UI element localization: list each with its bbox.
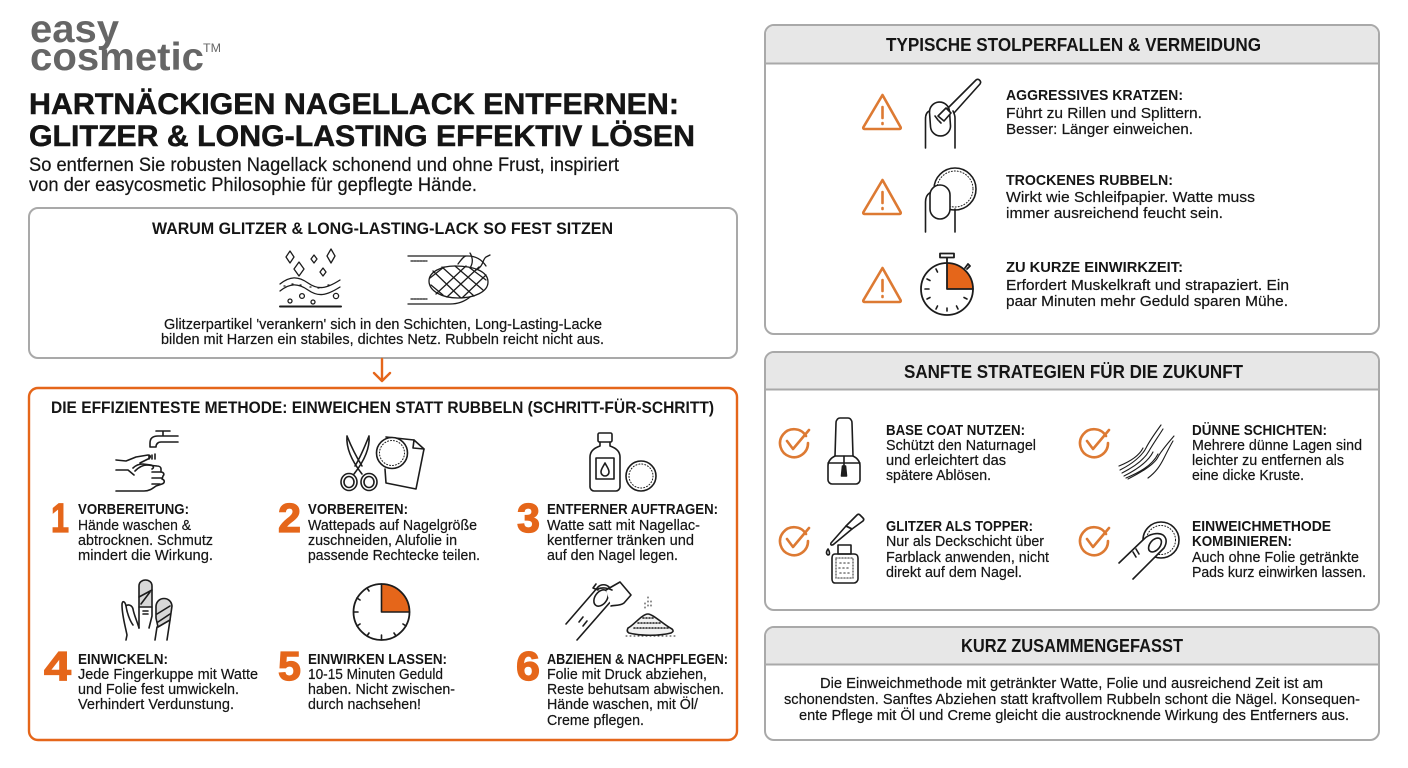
text: dünne schichten: Mehrere dünne Lagen sind: [1192, 437, 1362, 454]
text: base coat: BASE COAT NUTZEN:: [886, 422, 1025, 439]
panel: warum: [29, 208, 737, 358]
text: base coat: [886, 422, 1036, 484]
text: step 1: mindert die Wirkung.: [78, 547, 213, 564]
icon: peeling foil and residue: [566, 582, 676, 640]
text: step 4: und Folie fest umwickeln.: [78, 681, 239, 698]
text: step 3: Watte satt mit Nagellac-: [547, 517, 700, 534]
text: trockenes rubbeln: TROCKENES RUBBELN:: [1006, 172, 1173, 189]
text: step 5: EINWIRKEN LASSEN:: [308, 651, 447, 668]
icon: glitter brush and bottle: [826, 514, 864, 583]
icon: remover bottle and pad: [590, 433, 656, 491]
text: base coat: Schützt den Naturnagel: [886, 437, 1036, 454]
number 1: 1: [51, 495, 69, 541]
text: step 4: Verhindert Verdunstung.: [78, 696, 234, 713]
text: step 2: Wattepads auf Nagelgröße: [308, 517, 477, 534]
text: glitzer als topper: direkt auf dem Nagel.: [886, 564, 1022, 581]
text: warum: bilden mit Harzen ein stabiles, dichtes Netz. Rubbeln reicht nicht aus.: [161, 331, 604, 348]
heading: stolperfallen: TYPISCHE STOLPERFALLEN & VERMEIDUNG: [886, 35, 1261, 55]
text: step 4: Jede Fingerkuppe mit Watte: [78, 666, 258, 683]
text: step 6: ABZIEHEN & NACHPFLEGEN:: [547, 651, 728, 668]
number 5: 5: [278, 643, 301, 689]
text: step 5: durch nachsehen!: [308, 696, 421, 713]
subtitle: [29, 155, 620, 196]
text: step 2: VORBEREITEN:: [308, 501, 408, 518]
text: step 5: haben. Nicht zwischen-: [308, 681, 455, 698]
text: dünne schichten: eine dicke Kruste.: [1192, 467, 1304, 484]
text: dünne schichten: [1192, 422, 1362, 484]
text: step 1: VORBEREITUNG:: [78, 501, 189, 518]
text: zusammenfassung: [784, 675, 1360, 724]
number 2: 2: [278, 495, 301, 541]
text: step 5: 10-15 Minuten Geduld: [308, 666, 443, 683]
text: warum: Glitzerpartikel 'verankern' sich in den Schichten, Long-Lasting-Lacke: [164, 316, 602, 333]
text: glitzer als topper: Farblack anwenden, nicht: [886, 549, 1050, 566]
text: step 3: auf den Nagel legen.: [547, 547, 678, 564]
icon: warning 1: [863, 95, 901, 129]
heading: warum: WARUM GLITZER & LONG-LASTING-LACK SO FEST SITZEN: [152, 219, 613, 238]
text: dünne schichten: DÜNNE SCHICHTEN:: [1192, 422, 1327, 439]
icon: check 1: [780, 429, 809, 457]
logo: cosmetic: [30, 36, 204, 79]
logo: easy: [30, 8, 119, 51]
heading: methode: DIE EFFIZIENTESTE METHODE: EINWEICHEN STATT RUBBELN (SCHRITT-FÜR-SCHRITT): [51, 398, 714, 417]
text: aggressives kratzen: AGGRESSIVES KRATZEN:: [1006, 87, 1183, 104]
text: glitzer als topper: GLITZER ALS TOPPER:: [886, 518, 1033, 535]
text: einweichmethode kombinieren: Auch ohne Folie getränkte: [1192, 549, 1359, 566]
icon: base coat bottle: [828, 418, 860, 484]
text: base coat: und erleichtert das: [886, 452, 1006, 469]
icon: wrapped fingers: [122, 580, 172, 640]
title: GLITZER & LONG-LASTING EFFEKTIV LÖSEN: [29, 120, 695, 153]
icon: thin layers: [1119, 425, 1174, 479]
text: einweichmethode kombinieren: EINWEICHMETHODE: [1192, 518, 1331, 535]
text: einweichmethode kombinieren: [1192, 518, 1366, 581]
text: step 2: passende Rechtecke teilen.: [308, 547, 480, 564]
title: [29, 88, 695, 153]
panel: strategien: [765, 352, 1379, 610]
subtitle: So entfernen Sie robusten Nagellack schonend und ohne Frust, inspiriert: [29, 155, 620, 176]
icon: warning 3: [863, 268, 901, 302]
icon: check 2: [1080, 429, 1109, 457]
icon: resin net: [408, 253, 490, 304]
panel: zusammenfassung: [765, 627, 1379, 740]
text: step 3: [547, 501, 718, 564]
icon: finger scratching: [926, 79, 981, 148]
text: step 4: [78, 651, 258, 713]
text: step 6: Reste behutsam abwischen.: [547, 681, 724, 698]
text: einweichmethode kombinieren: Pads kurz einwirken lassen.: [1192, 564, 1366, 581]
text: step 1: Hände waschen &: [78, 517, 191, 534]
logo: [30, 8, 221, 79]
subtitle: von der easycosmetic Philosophie für gepflegte Hände.: [29, 175, 477, 196]
text: zu kurze einwirkzeit: paar Minuten mehr Geduld sparen Mühe.: [1006, 293, 1288, 310]
text: base coat: spätere Ablösen.: [886, 467, 991, 484]
text: dünne schichten: leichter zu entfernen als: [1192, 452, 1344, 469]
text: trockenes rubbeln: immer ausreichend feucht sein.: [1006, 205, 1223, 222]
text: einweichmethode kombinieren: KOMBINIEREN:: [1192, 533, 1292, 550]
number 6: 6: [516, 643, 540, 689]
text: zu kurze einwirkzeit: [1006, 259, 1289, 310]
text: trockenes rubbeln: Wirkt wie Schleifpapier. Watte muss: [1006, 189, 1255, 206]
text: glitzer als topper: Nur als Deckschicht über: [886, 533, 1044, 550]
text: trockenes rubbeln: [1006, 172, 1255, 222]
text: aggressives kratzen: Führt zu Rillen und Splittern.: [1006, 105, 1202, 122]
number 4: 4: [44, 643, 71, 689]
panel: methode: [29, 388, 737, 740]
icon: finger with dry pad: [926, 168, 976, 232]
icon: warning 2: [863, 180, 901, 214]
icon: check 3: [780, 527, 809, 555]
logo: TM: [203, 41, 221, 55]
icon: hands washing: [116, 431, 178, 491]
icon: stopwatch: [921, 254, 973, 315]
text: step 3: kentferner tränken und: [547, 532, 694, 549]
icon: check 4: [1080, 527, 1109, 555]
text: step 6: Hände waschen, mit Öl/: [547, 695, 699, 713]
text: step 2: zuschneiden, Alufolie in: [308, 532, 457, 549]
panel: stolperfallen: [765, 25, 1379, 334]
text: zusammenfassung: ente Pflege mit Öl und Creme gleicht die austrocknende Wirkung des Entferners aus.: [799, 706, 1349, 724]
arrow: [374, 359, 390, 381]
text: step 5: [308, 651, 455, 713]
icon: glitter layers: [280, 249, 341, 306]
text: zusammenfassung: Die Einweichmethode mit getränkter Watte, Folie und ausreichend Zeit ist am: [820, 675, 1323, 692]
text: step 6: [547, 651, 728, 729]
text: zusammenfassung: schonendsten. Sanftes Abziehen statt kraftvollem Rubbeln schont die Nägel. Konsequen-: [784, 691, 1360, 708]
text: step 3: ENTFERNER AUFTRAGEN:: [547, 501, 718, 518]
text: step 6: Folie mit Druck abziehen,: [547, 666, 707, 683]
text: warum: [161, 316, 604, 348]
text: zu kurze einwirkzeit: ZU KURZE EINWIRKZEIT:: [1006, 259, 1183, 276]
text: step 6: Creme pflegen.: [547, 712, 644, 729]
number 3: 3: [517, 495, 540, 541]
text: step 1: abtrocknen. Schmutz: [78, 532, 213, 549]
text: zu kurze einwirkzeit: Erfordert Muskelkraft und strapaziert. Ein: [1006, 277, 1289, 294]
text: glitzer als topper: [886, 518, 1050, 581]
text: step 4: EINWICKELN:: [78, 651, 168, 668]
icon: clock: [354, 584, 410, 640]
icon: scissors and foil: [341, 436, 424, 490]
title: HARTNÄCKIGEN NAGELLACK ENTFERNEN:: [29, 88, 679, 121]
heading: zusammenfassung: KURZ ZUSAMMENGEFASST: [961, 636, 1183, 656]
text: aggressives kratzen: Besser: Länger einweichen.: [1006, 121, 1193, 138]
heading: strategien: SANFTE STRATEGIEN FÜR DIE ZUKUNFT: [904, 362, 1243, 382]
icon: finger on soaked pad: [1119, 522, 1179, 579]
text: step 2: [308, 501, 480, 564]
text: step 1: [78, 501, 213, 564]
text: aggressives kratzen: [1006, 87, 1202, 138]
